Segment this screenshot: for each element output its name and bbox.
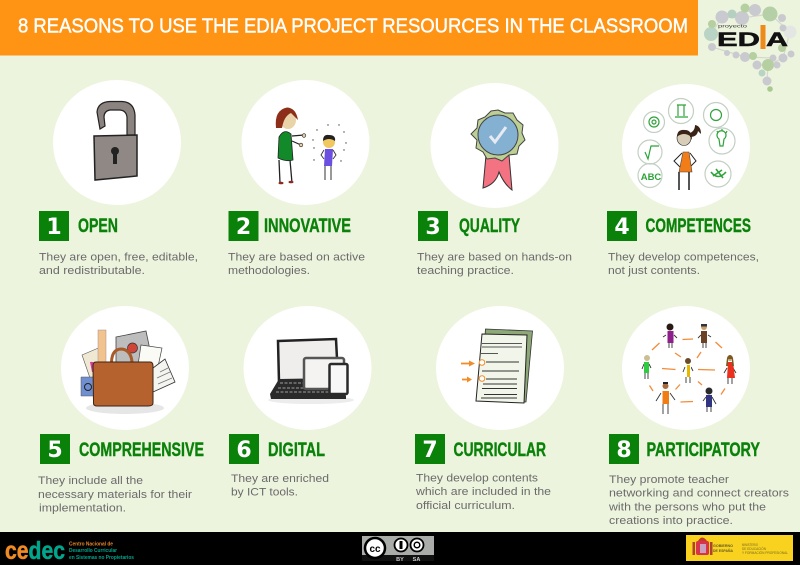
description [608,474,790,527]
panel: reason 2 innovative [228,80,370,277]
number badge 6 [229,434,259,464]
description: implementation. [39,502,126,514]
number badge 2 [228,211,258,241]
number badge 3 [418,211,448,241]
description: They are enriched [231,473,329,485]
logo: Spanish ministry: DE ESPAÑA [713,548,733,553]
number badge 5 [40,434,70,464]
panel: reason 6 digital [229,306,372,498]
number badge 8: 8 [616,438,632,463]
logo: EDIA: A [766,30,788,51]
heading: digital: DIGITAL [268,439,325,461]
icon: briefcase with materials [81,330,175,414]
heading: competences: COMPETENCES [646,215,751,237]
heading: open: OPEN [78,215,118,237]
panel: reason 5 comprehensive [38,306,204,514]
description [608,252,759,277]
badge: creative commons BY-SA: cc [369,544,381,555]
panel: reason 4 competences [607,84,759,277]
description [415,472,551,512]
logo: Spanish ministry: GOBIERNO [713,544,733,548]
number badge 1 [39,211,69,241]
description [417,252,572,277]
description: They develop contents [416,472,539,484]
description: teaching practice. [417,265,514,277]
number badge 1: 1 [46,215,62,240]
description: not just contents. [608,265,700,277]
icon: curriculum document with arrows [461,329,532,403]
title: 8 REASONS TO USE THE EDIA PROJECT RESOURCES IN THE CLASSROOM [18,16,688,38]
logo: cedec: Desarrollo Curricular [69,548,118,554]
logo: cedec: en Sistemas no Propietarios [69,555,134,561]
badge: creative commons BY-SA [362,536,434,563]
logo: cedec [5,537,134,565]
panel: reason 3 quality [417,83,572,277]
icon: open padlock [94,102,137,180]
number badge 7 [415,434,445,464]
description: necessary materials for their [38,489,192,501]
panel: reason 1 open [39,80,198,277]
description: networking and connect creators [609,488,790,500]
number badge 3: 3 [425,215,441,240]
description: They promote teacher [609,474,729,486]
heading: comprehensive: COMPREHENSIVE [79,439,204,461]
icon: network of people [642,324,736,414]
number badge 4 [607,211,637,241]
panel: reason 8 participatory [608,306,790,527]
description: official curriculum. [416,500,515,512]
description: which are included in the [415,486,551,498]
badge: creative commons BY-SA: SA [413,557,420,563]
logo: Spanish ministry [686,535,793,561]
heading: innovative: INNOVATIVE [264,215,351,237]
logo: cedec: Centro Nacional de [69,542,113,548]
number badge 8 [609,434,639,464]
header banner [0,0,698,56]
description: They are open, free, editable, [39,252,198,264]
description [38,475,192,514]
icon: laptop, tablet and phone [268,339,354,404]
description: They develop competences, [608,252,759,264]
number badge 5: 5 [47,438,63,463]
description: They are based on hands-on [417,252,572,264]
icon: teacher and child [276,108,347,184]
number badge 2: 2 [236,215,251,240]
description: They include all the [38,475,143,487]
logo: Spanish ministry: Y FORMACIÓN PROFESIONAL [742,550,788,555]
icon: quality rosette [471,110,525,190]
number badge 7: 7 [422,438,438,463]
description [228,252,365,277]
logo: EDIA [704,4,796,92]
icon: competence bubbles [638,98,735,188]
heading: participatory: PARTICIPATORY [646,439,760,461]
footer bar [0,532,800,565]
logo: EDIA: ED [717,30,760,51]
description: with the persons who put the [608,502,766,514]
panel: reason 7 curricular [415,306,564,512]
description: They are based on active [228,252,365,264]
description: methodologies. [228,265,310,277]
description [231,473,329,498]
description: and redistributable. [39,265,145,277]
badge: creative commons BY-SA: BY [396,557,404,563]
logo: cedec: cedec [5,537,65,565]
label: ABC: ABC [641,172,661,183]
logo: Spanish ministry: MINISTERIO [742,543,758,547]
logo: EDIA: proyecto [718,24,748,28]
description: by ICT tools. [231,486,298,498]
heading: curricular: CURRICULAR [454,439,546,461]
description [39,252,198,277]
number badge 6: 6 [236,438,252,463]
number badge 4: 4 [614,215,630,240]
heading: quality: QUALITY [459,215,520,237]
icon: girl in orange dress [674,125,701,190]
description: creations into practice. [609,515,733,527]
logo: Spanish ministry: DE EDUCACIÓN [742,546,766,551]
